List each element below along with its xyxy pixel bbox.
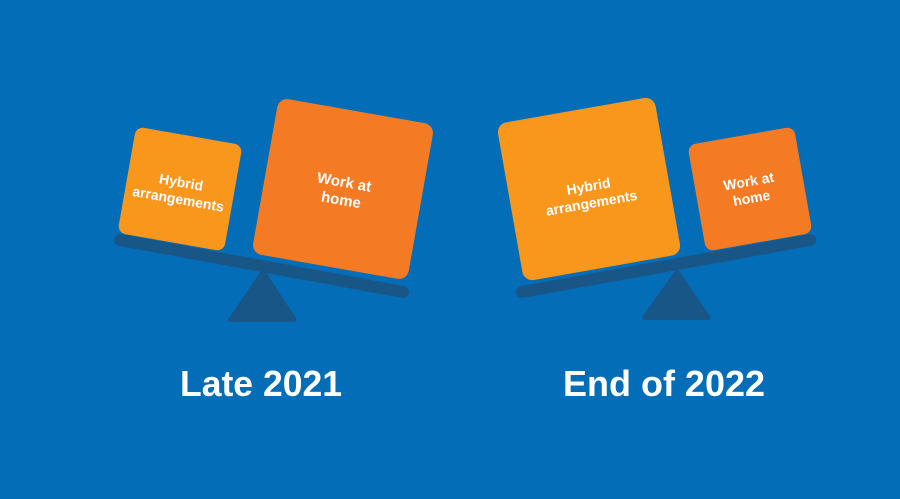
box: hybrid arrangements (left): Hybrid — [158, 170, 204, 194]
icon: fulcrum left — [228, 268, 296, 322]
box: work at home (left) — [251, 97, 435, 281]
box: hybrid arrangements (right): Hybrid — [565, 174, 612, 198]
beam right — [522, 240, 810, 292]
label: Late 2021: Late 2021 — [180, 363, 342, 404]
beam left — [120, 240, 403, 292]
box: hybrid arrangements (right): arrangements — [544, 187, 639, 219]
box: hybrid arrangements (left): arrangements — [131, 183, 225, 215]
icon: fulcrum right — [642, 268, 710, 320]
box: work at home (right) — [687, 126, 813, 252]
panel: late 2021 scale — [117, 97, 435, 322]
box: hybrid arrangements (right) — [496, 96, 682, 282]
box: work at home (right): Work at — [722, 169, 775, 193]
panel: end of 2022 scale — [496, 96, 813, 320]
box: work at home (left): Work at — [316, 169, 373, 196]
label: End of 2022: End of 2022 — [563, 363, 765, 404]
box: hybrid arrangements (left) — [117, 126, 243, 252]
box: work at home (left): home — [320, 188, 362, 212]
box: work at home (right): home — [732, 187, 772, 209]
